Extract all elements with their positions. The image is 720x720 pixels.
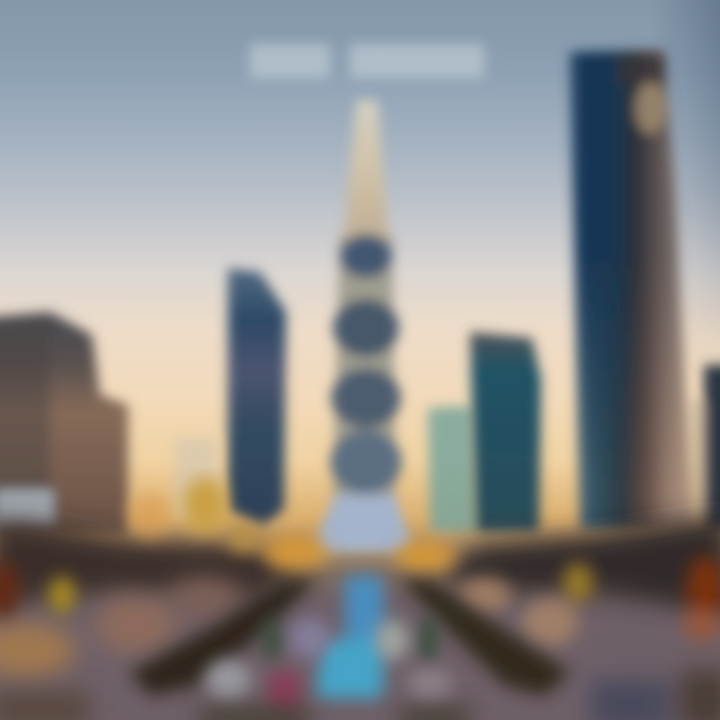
far right building bbox=[704, 365, 720, 530]
central blue water channel bbox=[316, 575, 386, 698]
blurred scene bbox=[0, 44, 720, 552]
street scene bbox=[0, 477, 720, 720]
tall right tower bbox=[570, 50, 692, 530]
right warm road lights bbox=[459, 556, 720, 646]
central tower base glow bbox=[310, 495, 414, 552]
dark horizon band left bbox=[0, 520, 300, 604]
distant pale building left bbox=[175, 438, 217, 518]
golden lights right bbox=[395, 540, 455, 572]
right edge dark vignette bbox=[667, 0, 720, 355]
pale strip between tower and edge bbox=[692, 400, 706, 520]
central spire tower bbox=[330, 100, 402, 525]
mid-left tower bbox=[228, 268, 286, 526]
pale teal building bbox=[428, 406, 474, 532]
left building cluster bbox=[0, 312, 128, 535]
street figures and planters bbox=[206, 614, 452, 710]
teal tower bbox=[470, 332, 541, 532]
street level base bbox=[0, 590, 720, 720]
dark hedge right bbox=[398, 578, 570, 696]
left warm road lights bbox=[0, 578, 241, 678]
left accent lights bbox=[0, 562, 75, 618]
blurred title bbox=[250, 44, 484, 78]
dark horizon band right bbox=[440, 515, 720, 614]
bottom edge shadows bbox=[0, 670, 720, 720]
dark hedge left bbox=[130, 578, 318, 696]
golden lights left bbox=[132, 477, 328, 570]
